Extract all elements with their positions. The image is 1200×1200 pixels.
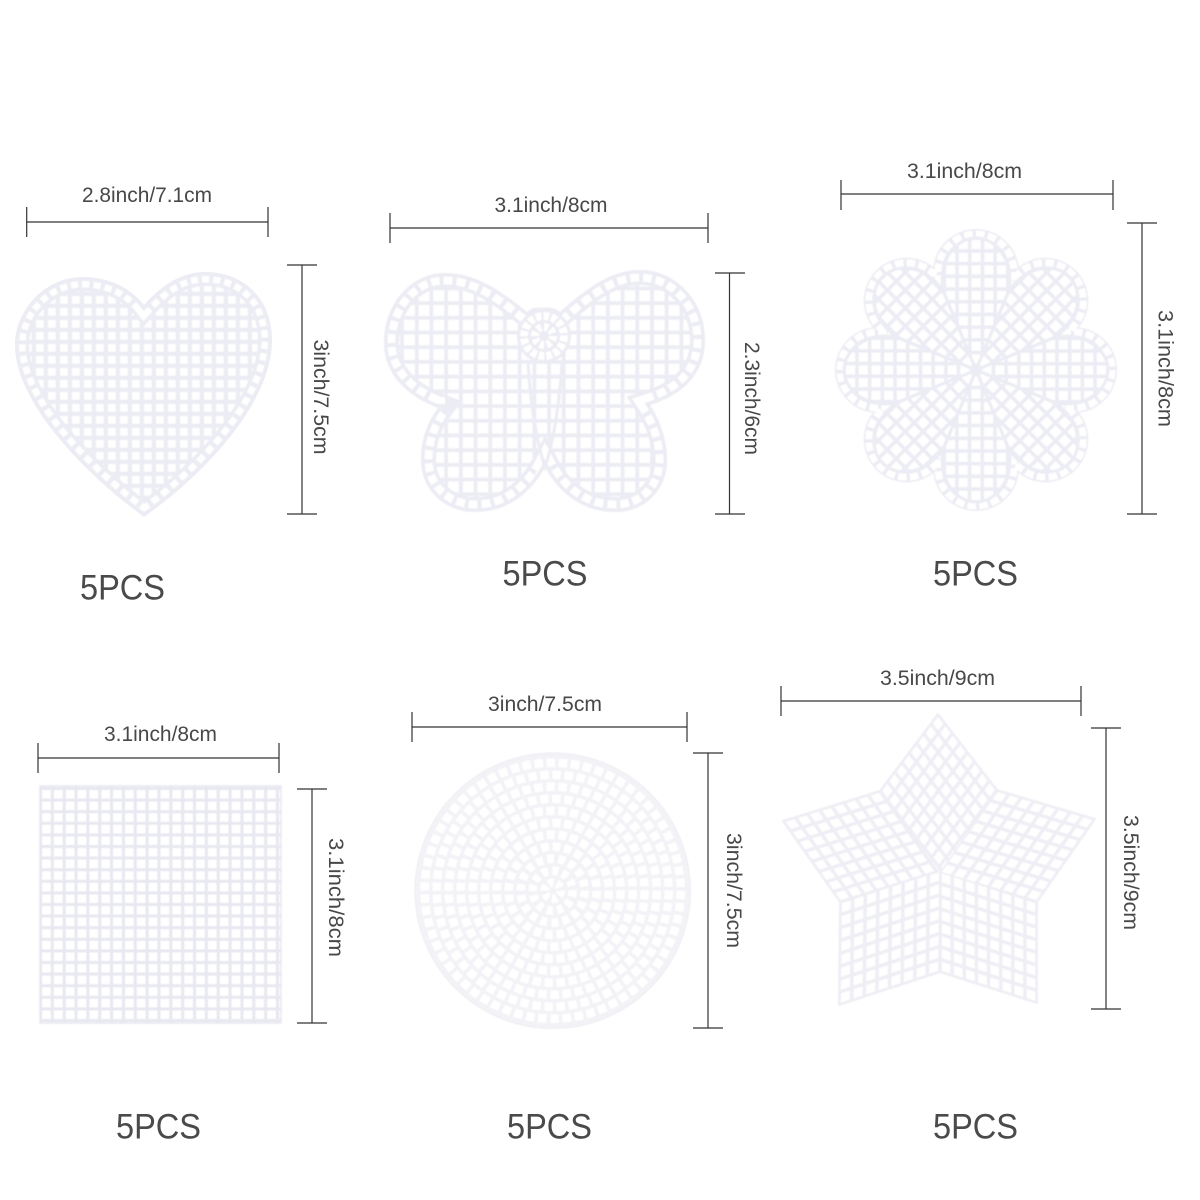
quantity: star: 5PCS bbox=[933, 1108, 1018, 1146]
width measure: heart bbox=[27, 183, 268, 237]
width measure: heart: 2.8inch/7.1cm bbox=[82, 183, 212, 207]
width measure: flower: 3.1inch/8cm bbox=[907, 159, 1022, 183]
height measure: circle: 3inch/7.5cm bbox=[722, 833, 746, 948]
icon: square plastic canvas bbox=[40, 786, 281, 1023]
panel: square bbox=[38, 722, 348, 1146]
height measure: star: 3.5inch/9cm bbox=[1119, 815, 1143, 930]
panel: butterfly bbox=[384, 193, 764, 594]
height measure: square bbox=[297, 789, 348, 1023]
width measure: square: 3.1inch/8cm bbox=[104, 722, 217, 746]
quantity: flower: 5PCS bbox=[933, 554, 1018, 594]
width measure: butterfly bbox=[390, 193, 708, 243]
panel: star bbox=[781, 666, 1143, 1146]
width measure: square bbox=[38, 722, 279, 773]
panel: flower bbox=[835, 159, 1178, 594]
quantity: circle: 5PCS bbox=[507, 1108, 592, 1146]
width measure: star: 3.5inch/9cm bbox=[880, 666, 995, 690]
height measure: heart bbox=[287, 265, 333, 514]
width measure: circle bbox=[412, 692, 687, 742]
height measure: square: 3.1inch/8cm bbox=[324, 838, 348, 957]
width measure: star bbox=[781, 666, 1081, 716]
panel: heart bbox=[15, 183, 333, 608]
icon: butterfly plastic canvas bbox=[384, 270, 705, 512]
width measure: butterfly: 3.1inch/8cm bbox=[494, 193, 608, 217]
panel: circle bbox=[412, 692, 746, 1146]
width measure: flower bbox=[841, 159, 1113, 210]
height measure: star bbox=[1091, 728, 1143, 1009]
height measure: flower bbox=[1127, 223, 1178, 514]
height measure: butterfly bbox=[715, 273, 764, 514]
quantity: butterfly: 5PCS bbox=[502, 554, 588, 594]
icon: flower plastic canvas bbox=[835, 229, 1117, 511]
height measure: butterfly: 2.3inch/6cm bbox=[740, 342, 764, 455]
icon: star plastic canvas bbox=[783, 714, 1095, 1005]
height measure: flower: 3.1inch/8cm bbox=[1154, 310, 1178, 427]
quantity: heart: 5PCS bbox=[80, 568, 165, 608]
height measure: heart: 3inch/7.5cm bbox=[309, 340, 333, 454]
icon: heart plastic canvas bbox=[15, 272, 272, 517]
height measure: circle bbox=[693, 753, 746, 1028]
quantity: square: 5PCS bbox=[116, 1108, 201, 1146]
width measure: circle: 3inch/7.5cm bbox=[488, 692, 602, 716]
icon: circle plastic canvas bbox=[415, 753, 690, 1028]
